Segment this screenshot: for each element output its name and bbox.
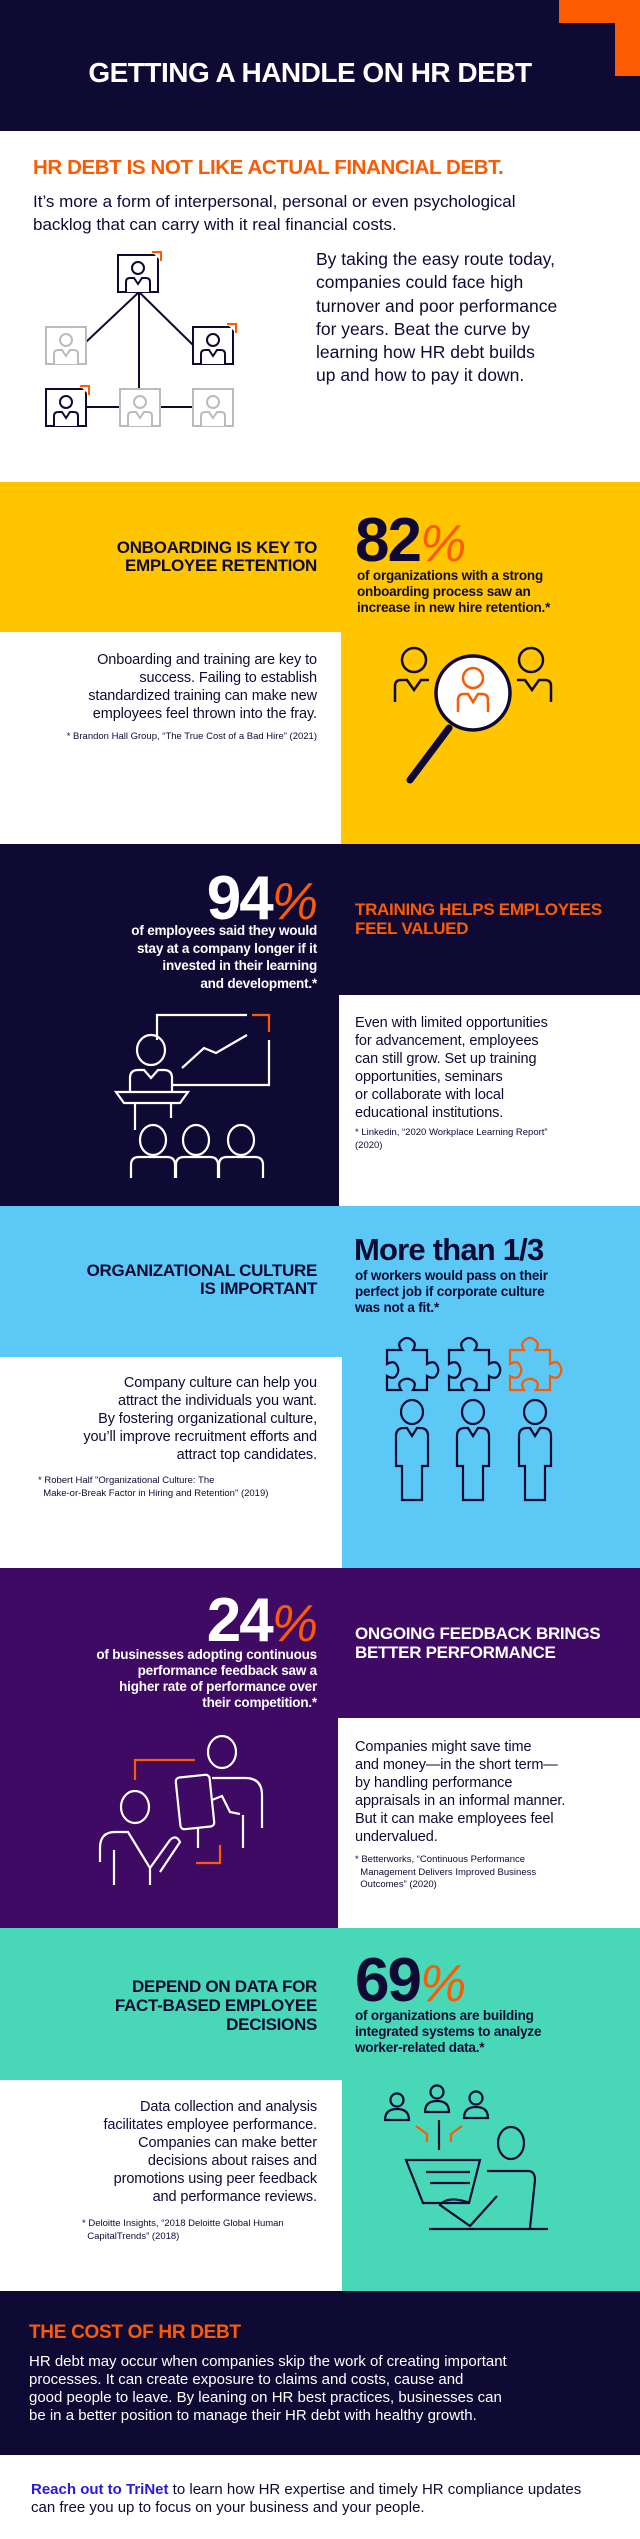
source: Make-or-Break Factor in Hiring and Retention" (2019): [43, 1488, 268, 1498]
stat text: higher rate of performance over: [119, 1679, 317, 1694]
body text: undervalued.: [355, 1829, 438, 1845]
body text: [355, 1739, 565, 1845]
source: [82, 2218, 284, 2242]
heading: ONGOING FEEDBACK BRINGS: [355, 1624, 600, 1643]
stat text: [96, 1647, 318, 1710]
stat text: their competition.*: [202, 1695, 317, 1710]
source: Management Delivers Improved Business: [360, 1866, 536, 1878]
stat text: of organizations are building: [355, 2008, 534, 2023]
intro side text: learning how HR debt builds: [316, 342, 535, 362]
heading: [115, 1977, 317, 2034]
source: [38, 1475, 268, 1498]
icon: puzzle people: [386, 1336, 562, 1502]
orange corner accent: [559, 0, 640, 23]
icon: presenter: [114, 1014, 270, 1178]
panel: culture: [0, 1206, 640, 1568]
intro side text: up and how to pay it down.: [316, 365, 524, 385]
stat number: 94%: [207, 864, 318, 933]
heading: [355, 1624, 600, 1662]
stat text: [355, 1268, 548, 1315]
white text box: [339, 995, 640, 1206]
source: * Deloitte Insights, “2018 Deloitte Global Human: [82, 2218, 284, 2229]
heading: BETTER PERFORMANCE: [355, 1643, 556, 1662]
intro side text: for years. Beat the curve by: [316, 319, 530, 339]
body text: decisions about raises and: [148, 2153, 317, 2169]
body text: Companies might save time: [355, 1739, 531, 1755]
stat text: of businesses adopting continuous: [96, 1647, 317, 1662]
icon: data analyst: [384, 2084, 548, 2230]
call to action: Reach out to TriNet to learn how HR expertise and timely HR compliance updates: [31, 2481, 581, 2498]
stat text: perfect job if corporate culture: [355, 1284, 544, 1299]
header band: [0, 0, 640, 131]
stat text: of employees said they would: [131, 923, 317, 938]
panel: data: [0, 1928, 640, 2291]
body text: attract top candidates.: [177, 1447, 317, 1463]
source: [355, 1854, 536, 1890]
stat number: 82%: [355, 506, 466, 575]
body text: promotions using peer feedback: [114, 2171, 317, 2187]
source: CapitalTrends” (2018): [87, 2230, 179, 2242]
body text: processes. It can create exposure to claims and costs, cause and: [29, 2371, 463, 2388]
heading: [117, 538, 317, 575]
icon: magnifier with people: [394, 646, 552, 784]
panel: feedback: [0, 1568, 640, 1928]
body text: [355, 1015, 548, 1121]
source: * Robert Half "Organizational Culture: The: [38, 1475, 214, 1486]
intro heading: HR DEBT IS NOT LIKE ACTUAL FINANCIAL DEBT.: [33, 156, 503, 179]
stat text: increase in new hire retention.*: [357, 600, 550, 615]
source: * Betterworks, “Continuous Performance: [355, 1854, 525, 1865]
body text: [104, 2099, 318, 2205]
stat text: was not a fit.*: [355, 1300, 439, 1315]
source: Outcomes” (2020): [360, 1879, 437, 1890]
body text: [29, 2353, 507, 2424]
body text: employees feel thrown into the fray.: [93, 706, 317, 722]
intro text: [33, 192, 516, 234]
heading: TRAINING HELPS EMPLOYEES: [355, 900, 602, 919]
stat text: performance feedback saw a: [138, 1663, 317, 1678]
body text: Even with limited opportunities: [355, 1015, 548, 1031]
heading: FEEL VALUED: [355, 919, 468, 938]
body text: success. Failing to establish: [139, 670, 317, 686]
stat text: [355, 2008, 542, 2055]
body text: [88, 652, 318, 722]
body text: HR debt may occur when companies skip the work of creating important: [29, 2353, 507, 2370]
stat text: worker-related data.*: [355, 2040, 484, 2055]
intro text: It’s more a form of interpersonal, personal or even psychological: [33, 192, 516, 211]
body text: But it can make employees feel: [355, 1811, 554, 1827]
stat number: 69%: [355, 1946, 466, 2015]
intro side text: companies could face high: [316, 272, 523, 292]
intro side text: By taking the easy route today,: [316, 249, 555, 269]
body text: you’ll improve recruitment efforts and: [83, 1429, 317, 1445]
panel: cost of HR debt: [0, 2291, 640, 2455]
stat text: and development.*: [200, 976, 317, 990]
panel: onboarding: [0, 482, 640, 844]
body text: good people to leave. By leaning on HR best practices, businesses can: [29, 2389, 502, 2406]
body text: and performance reviews.: [153, 2189, 317, 2205]
panel: training: [0, 844, 640, 1206]
heading: ORGANIZATIONAL CULTURE: [87, 1261, 317, 1280]
heading: THE COST OF HR DEBT: [29, 2322, 241, 2343]
stat text: [357, 568, 550, 615]
stat text: of workers would pass on their: [355, 1268, 548, 1283]
body text: by handling performance: [355, 1775, 512, 1791]
white text box: [0, 2080, 342, 2291]
heading: [87, 1261, 318, 1298]
intro side text: turnover and poor performance: [316, 296, 557, 316]
white text box: [338, 1718, 640, 1928]
heading: IS IMPORTANT: [200, 1279, 317, 1298]
body text: or collaborate with local: [355, 1087, 504, 1103]
heading: EMPLOYEE RETENTION: [125, 556, 317, 575]
stat text: invested in their learning: [162, 958, 317, 973]
body text: appraisals in an informal manner.: [355, 1793, 565, 1809]
source: (2020): [355, 1140, 382, 1150]
body text: opportunities, seminars: [355, 1069, 503, 1085]
icon: org network: [45, 251, 237, 427]
call to action: can free you up to focus on your business and your people.: [31, 2499, 425, 2516]
body text: Companies can make better: [138, 2135, 317, 2151]
call to action: [31, 2481, 581, 2516]
body text: Onboarding and training are key to: [97, 652, 317, 668]
stat number: More than 1/3: [354, 1232, 543, 1267]
body text: By fostering organizational culture,: [98, 1411, 317, 1427]
heading: DECISIONS: [226, 2015, 317, 2034]
white text box: [0, 1357, 342, 1568]
body text: [83, 1375, 317, 1463]
heading: DEPEND ON DATA FOR: [132, 1977, 317, 1996]
body text: be in a better position to manage their HR debt with healthy growth.: [29, 2407, 477, 2424]
heading: ONBOARDING IS KEY TO: [117, 538, 317, 557]
heading: FACT-BASED EMPLOYEE: [115, 1996, 317, 2015]
icon: feedback people: [98, 1734, 264, 1885]
intro text: backlog that can carry with it real financial costs.: [33, 215, 397, 234]
stat text: [131, 923, 318, 991]
stat text: stay at a company longer if it: [137, 940, 317, 956]
stat text: integrated systems to analyze: [355, 2024, 541, 2039]
stat text: onboarding process saw an: [357, 584, 531, 599]
body text: attract the individuals you want.: [118, 1393, 317, 1409]
white text box: [0, 632, 341, 844]
body text: Data collection and analysis: [140, 2099, 317, 2115]
heading: [355, 900, 602, 938]
body text: for advancement, employees: [355, 1033, 539, 1049]
body text: standardized training can make new: [88, 688, 317, 704]
body text: can still grow. Set up training: [355, 1051, 536, 1067]
stat number: 24%: [207, 1586, 318, 1655]
stat text: of organizations with a strong: [357, 568, 543, 583]
intro side text: [316, 249, 557, 385]
body text: and money—in the short term—: [355, 1757, 558, 1773]
body text: Company culture can help you: [124, 1375, 317, 1391]
source: * Brandon Hall Group, “The True Cost of a Bad Hire” (2021): [67, 731, 317, 742]
source: * Linkedin, “2020 Workplace Learning Report”: [355, 1127, 548, 1138]
body text: educational institutions.: [355, 1105, 503, 1121]
body text: facilitates employee performance.: [104, 2117, 317, 2133]
title: GETTING A HANDLE ON HR DEBT: [88, 57, 532, 88]
source: [355, 1127, 548, 1150]
